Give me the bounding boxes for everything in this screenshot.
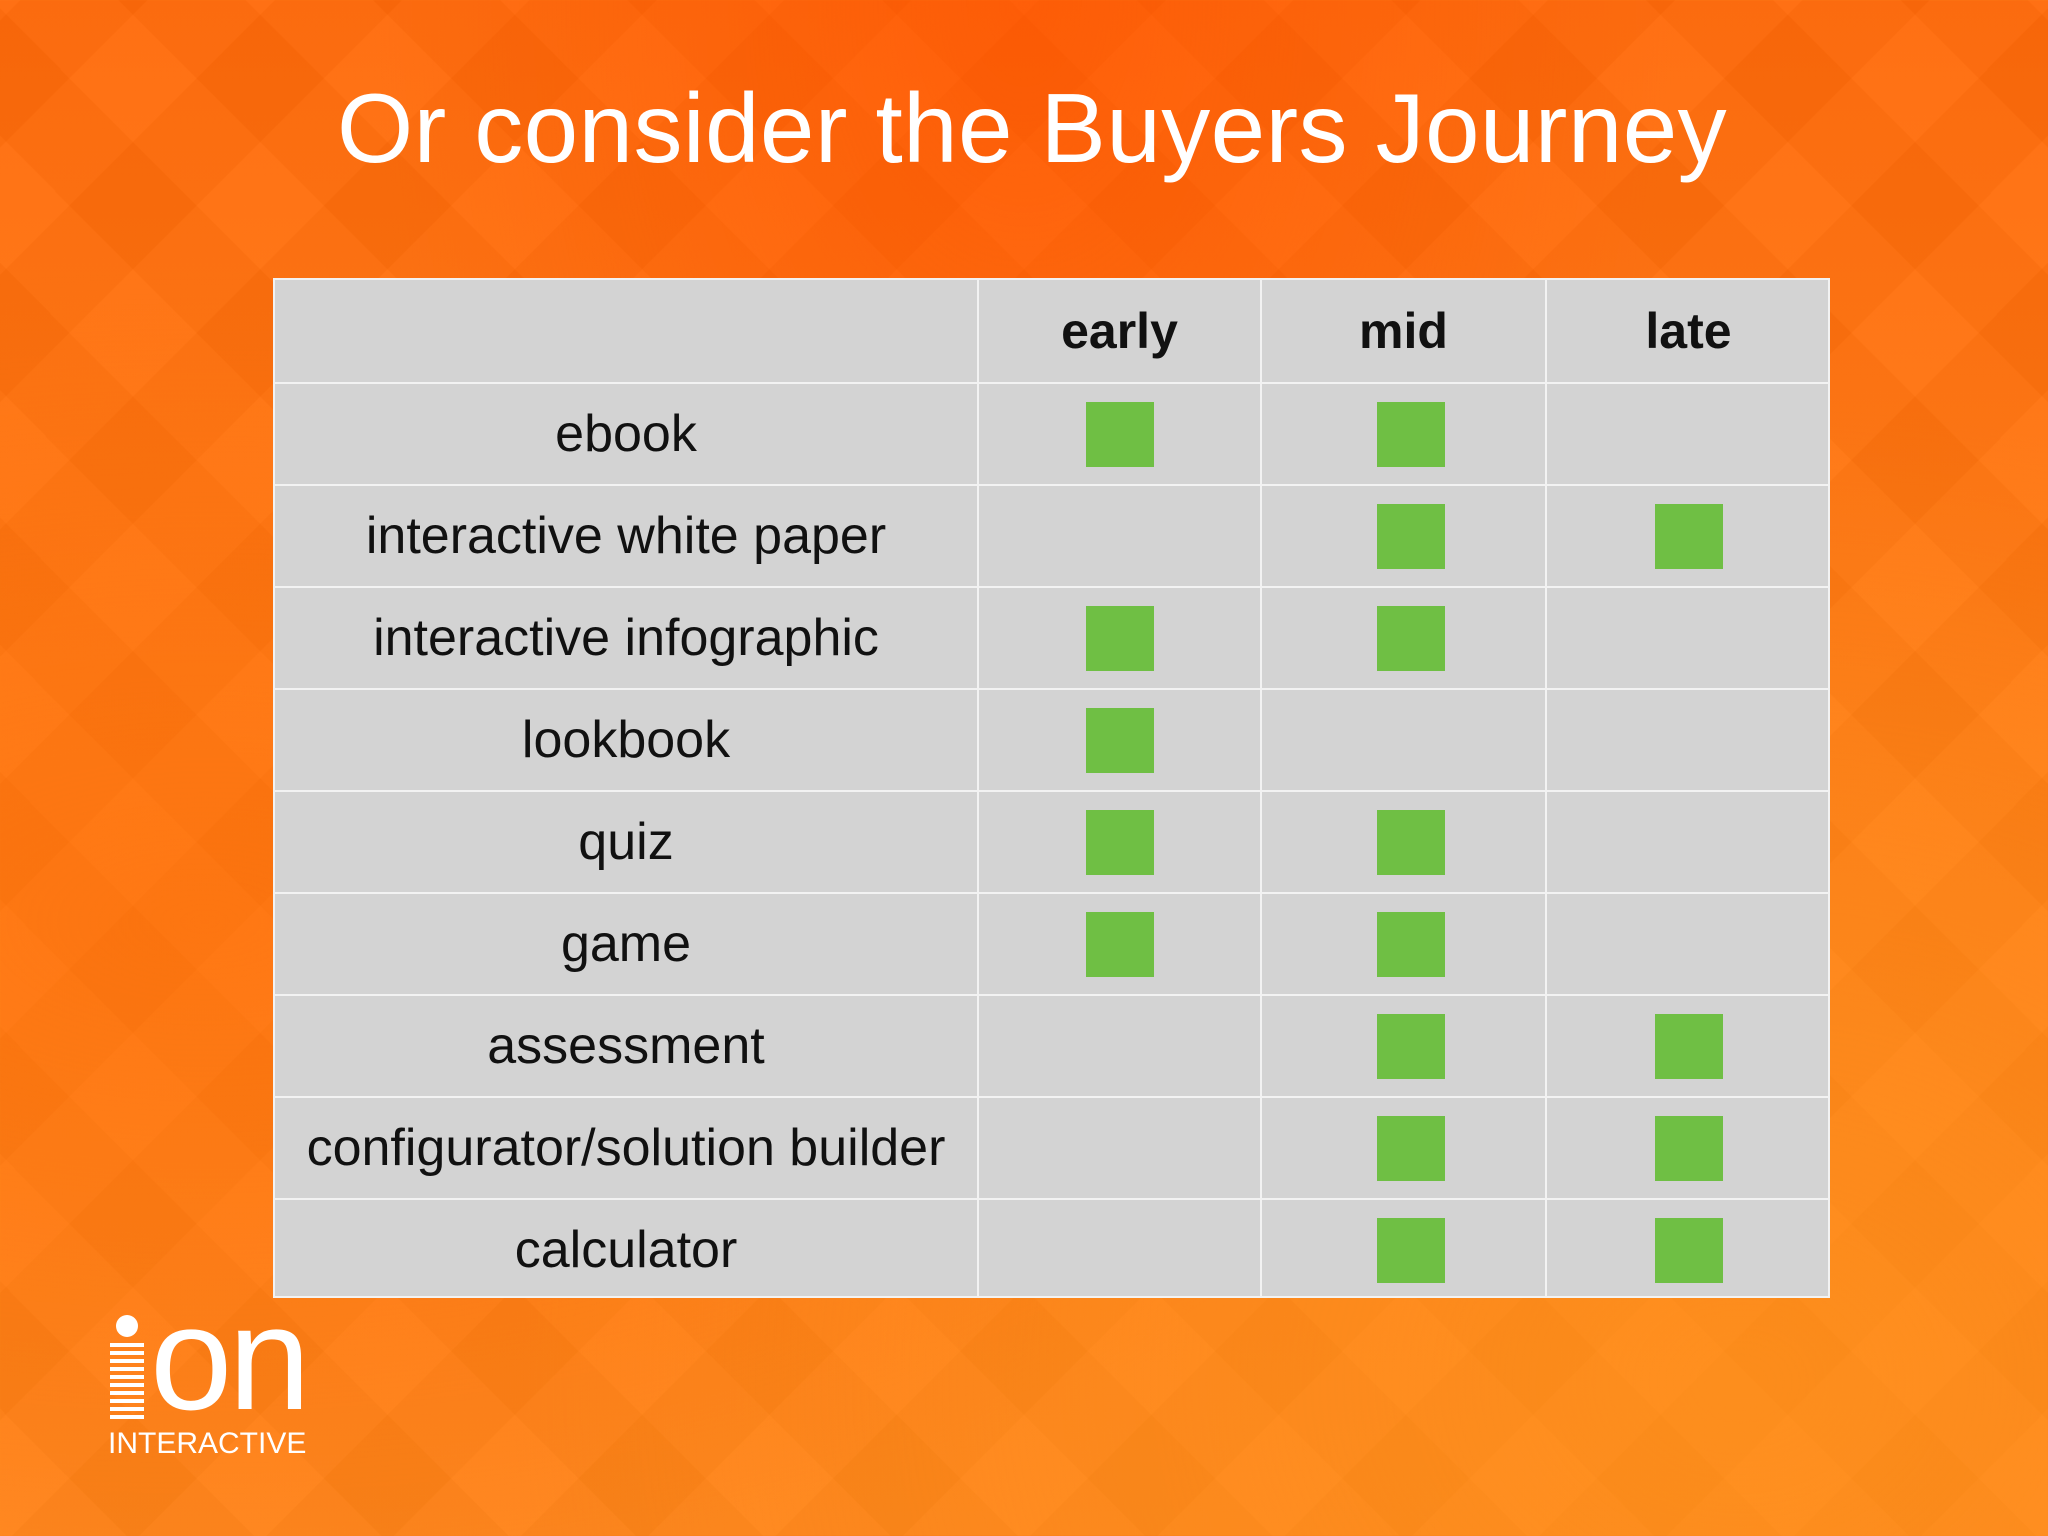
row: interactive white paper: interactive white paper xyxy=(366,507,886,565)
row: interactive infographic: interactive infographic xyxy=(373,609,879,667)
row: assessment: assessment xyxy=(487,1017,765,1075)
row: game: game xyxy=(561,915,691,973)
row: lookbook: lookbook xyxy=(522,711,730,769)
row: configurator xyxy=(275,1096,1828,1198)
row: quiz xyxy=(275,790,1828,892)
header row xyxy=(1061,303,1732,359)
row: assessment xyxy=(275,994,1828,1096)
title: Or consider the Buyers Journey xyxy=(337,73,1727,183)
row: interactive infographic xyxy=(275,586,1828,688)
header row: late xyxy=(1645,303,1732,359)
logo: ion interactive: on xyxy=(150,1276,307,1441)
table: buyers journey xyxy=(273,278,1830,1298)
row: lookbook xyxy=(275,688,1828,790)
row: ebook xyxy=(275,382,1828,484)
row: game xyxy=(275,892,1828,994)
row: calculator: calculator xyxy=(515,1221,737,1279)
logo: ion interactive: INTERACTIVE xyxy=(108,1427,306,1460)
row: interactive white paper xyxy=(275,484,1828,586)
header row: mid xyxy=(1359,303,1448,359)
header row: early xyxy=(1061,303,1178,359)
row: quiz: quiz xyxy=(578,813,674,871)
row: ebook: ebook xyxy=(555,405,697,463)
row: configurator: configurator/solution builder xyxy=(307,1119,945,1177)
row: calculator xyxy=(275,1198,1828,1300)
